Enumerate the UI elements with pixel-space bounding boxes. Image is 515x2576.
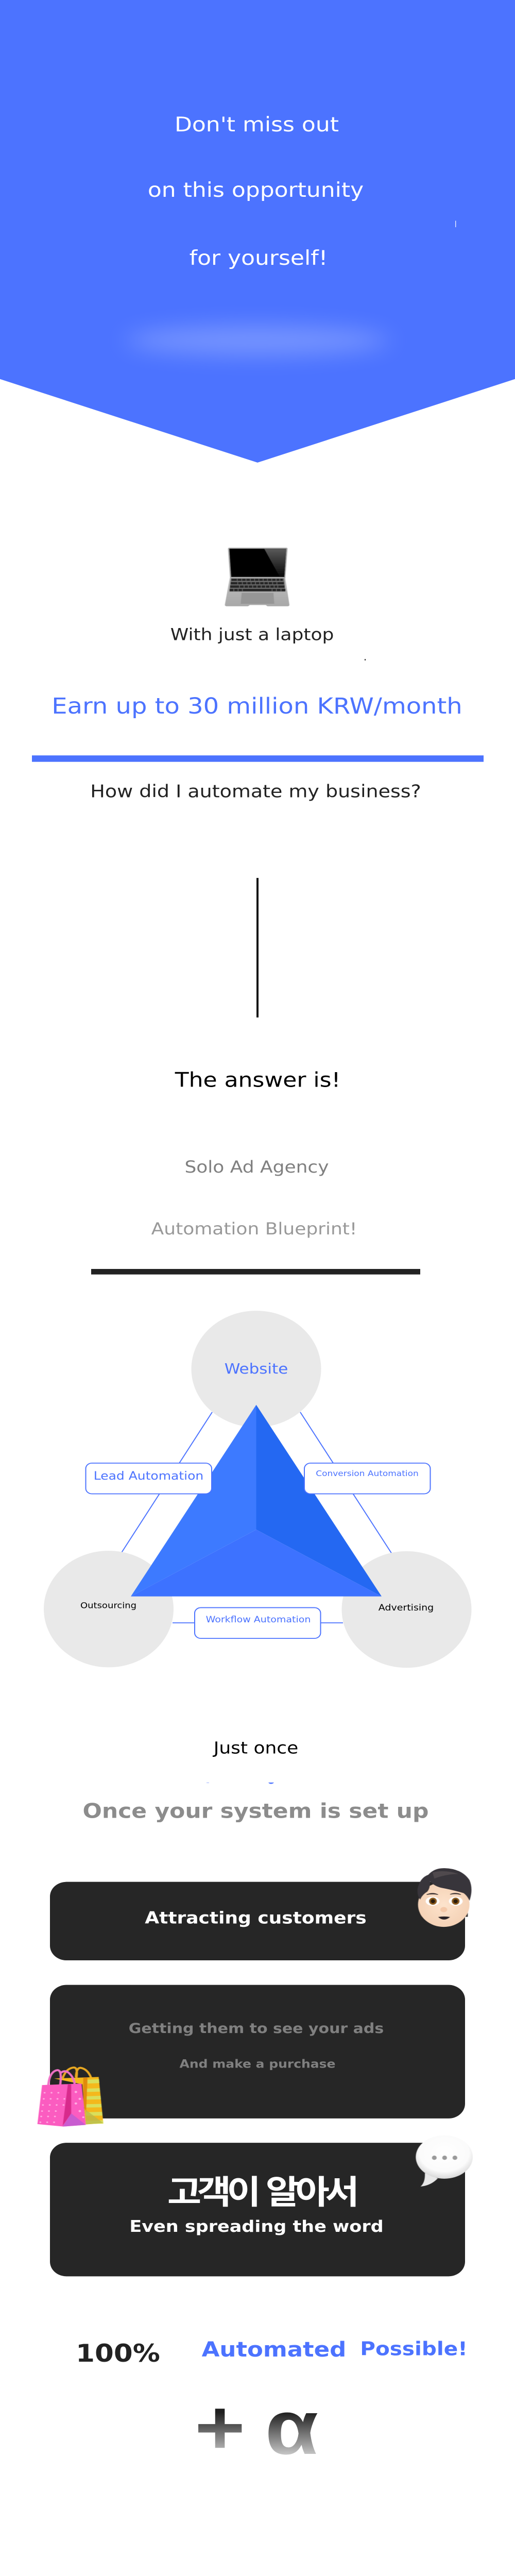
hero headline: [148, 112, 364, 269]
card: attracting customers: Attracting customers: [145, 1908, 367, 1928]
card: getting them to see your ads: Getting them to see your ads: [129, 2021, 384, 2037]
text: 100%: 100%: [76, 2339, 160, 2367]
divider bar: blue: [32, 755, 484, 762]
text: automation blueprint: Automation Blueprint!: [151, 1219, 357, 1239]
label: outsourcing: Outsourcing: [80, 1601, 136, 1611]
card: getting them to see your ads: [50, 1985, 465, 2119]
icon: person: [418, 1868, 471, 1927]
node: outsourcing: [44, 1551, 174, 1667]
pyramid: [131, 1405, 382, 1597]
divider bar: black: [91, 1269, 420, 1275]
box: conversion automation: [304, 1463, 431, 1494]
box: workflow automation: Workflow Automation: [206, 1615, 311, 1625]
card: getting them to see your ads: And make a purchase: [180, 2057, 335, 2071]
box: workflow automation: [195, 1607, 320, 1638]
icon: shopping bags: [38, 2067, 104, 2127]
label: advertising: Advertising: [379, 1603, 434, 1613]
text: possible: Possible!: [360, 2338, 468, 2360]
node: advertising: [342, 1551, 472, 1668]
text: with just a laptop: With just a laptop: [170, 625, 334, 645]
hero headline: on this opportunity: [148, 178, 364, 202]
icon: laptop: [225, 548, 289, 606]
text: just once: Just once: [213, 1739, 298, 1758]
box: conversion automation: Conversion Automation: [316, 1469, 419, 1478]
icon: speech bubble: [416, 2136, 473, 2187]
box: lead automation: Lead Automation: [94, 1469, 203, 1483]
heading: once your system is set up: Once your system is set up: [83, 1799, 428, 1823]
card: even spreading the word: Even spreading the word: [129, 2217, 384, 2235]
heading: earn up to 30 million: Earn up to 30 million KRW/month: [52, 693, 462, 719]
heading: the answer is: The answer is!: [175, 1068, 340, 1092]
box: lead automation: [85, 1463, 212, 1494]
node: website: Website: [225, 1361, 288, 1377]
hero banner: [0, 0, 515, 463]
text: tiny mark: [365, 659, 366, 660]
node: website: [192, 1311, 321, 1427]
card: even spreading the word: [50, 2143, 465, 2276]
hero headline: for yourself!: [190, 246, 328, 269]
text: solo ad agency: Solo Ad Agency: [184, 1158, 329, 1177]
hero headline: Don't miss out: [175, 112, 339, 136]
diagram: automation triangle: [44, 1311, 472, 1668]
card: attracting customers: [50, 1882, 465, 1960]
text: automated: Automated: [202, 2338, 346, 2362]
vertical line: [256, 878, 259, 1018]
clipped marks: [207, 1783, 274, 1784]
text: how did I automate: How did I automate my business?: [90, 782, 421, 802]
text: plus alpha: + α: [195, 2384, 318, 2470]
card: even spreading the word: 고객이 알아서: [167, 2165, 356, 2213]
